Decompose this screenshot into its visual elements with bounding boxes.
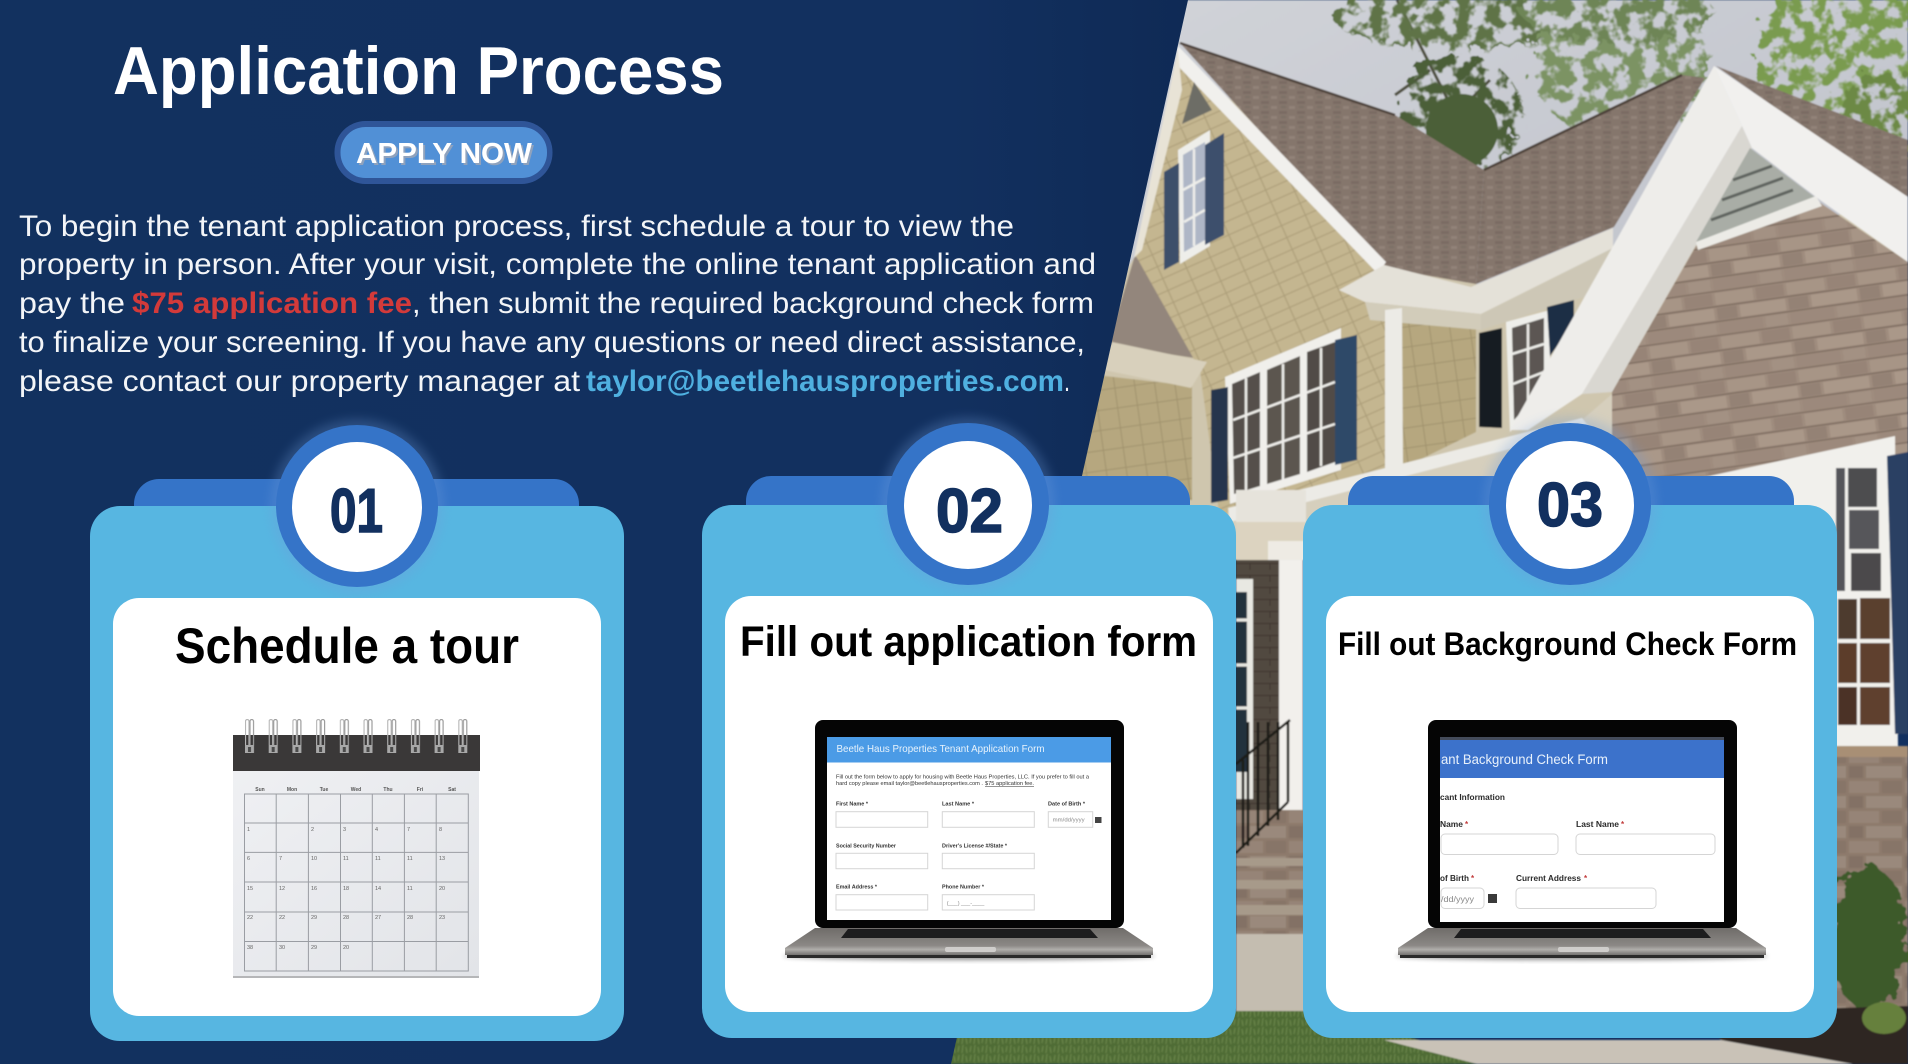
laptop with tenant application form: Date of Birth * [1048,802,1086,808]
laptop with tenant application form: Beetle Haus Properties Tenant Application Form [836,743,1045,755]
icon: wall calendar: 14 [375,886,381,892]
porch cornice between cards [1236,490,1306,522]
photo: suburban house background [940,0,1908,1064]
laptop with background check form: * [1621,820,1625,829]
icon: wall calendar [233,719,480,978]
left gable trim [1176,46,1386,274]
large window with shutters [1211,328,1357,504]
icon: wall calendar: 38 [247,945,253,951]
laptop with background check form [1396,720,1768,960]
apply now button: APPLY NOW [356,138,533,170]
shrub [1830,866,1906,1010]
panel: step 3 fill out background check form [1303,417,1837,1038]
lawn [940,1011,1477,1064]
number badge 02: 02 [936,477,1003,546]
laptop with tenant application form: Fill out the form below to apply for housing with Beetle Haus Properties, LLC. If you prefer to fill out a [836,774,1089,780]
lower left eave [1104,342,1207,388]
house base walls [1060,60,1908,530]
icon: wall calendar: 8 [439,827,442,833]
centre window with shutters [1479,300,1574,432]
card body [1303,505,1837,1038]
icon: wall calendar: 1 [247,827,250,833]
intro paragraph: pay the [19,287,125,320]
stone foundation, right [1830,757,1908,1027]
intro paragraph [19,210,1096,398]
icon: wall calendar: Thu [383,787,393,793]
sky [940,0,1908,520]
laptop with tenant application form: Email Address * [836,885,878,891]
main roof, left plane [1180,43,1484,284]
right lower window [1700,436,1898,746]
downspout and corner board [1385,308,1403,470]
icon: wall calendar: Mon [287,787,297,793]
lower left roof [1108,255,1208,360]
number badge 03 [1483,417,1657,591]
laptop with tenant application form: hard copy please email taylor@beetlehausproperties.com . [836,781,983,787]
porch side window [1236,579,1253,799]
siding, upper gable [1136,60,1388,520]
gable fascia, left leg [1510,66,1742,430]
card body [90,506,624,1041]
porch soffit [1236,522,1306,560]
icon: wall calendar: 11 [407,886,413,892]
icon: wall calendar: 29 [311,945,317,951]
upper window [1164,130,1224,270]
icon: wall calendar: 20 [439,886,445,892]
apply now button: APPLY NOW [358,140,535,172]
number badge 01: 01 [330,477,383,546]
intro paragraph: property in person. After your visit, complete the online tenant application and [19,248,1096,281]
panel: step 1 schedule a tour [90,419,624,1041]
porch brick wall [1236,560,1286,820]
icon: wall calendar: 13 [439,856,445,862]
icon: wall calendar: 11 [375,856,381,862]
intro paragraph: . [1064,365,1070,398]
icon: wall calendar: 29 [311,915,317,921]
intro paragraph: to finalize your screening. If you have any questions or need direct assistance, [19,326,1085,359]
trees behind the roof [1335,0,1908,180]
icon: wall calendar: 10 [311,856,317,862]
front steps [1236,810,1306,934]
icon: wall calendar: 20 [343,945,349,951]
window ledge [1830,746,1908,757]
icon: wall calendar: 12 [279,886,285,892]
laptop with tenant application form: Social Security Number [836,843,896,849]
icon: wall calendar: Fri [417,787,424,793]
intro paragraph: taylor@beetlehausproperties.com [586,365,1064,398]
back roof, right [1716,66,1908,208]
porch roof and cornice [1228,394,1612,560]
icon: wall calendar: 4 [375,827,378,833]
laptop with background check form: * [1584,874,1588,883]
intro paragraph: , then submit the required background check form [412,287,1094,320]
icon: wall calendar: 28 [343,915,349,921]
inner white panel [1326,596,1814,1012]
card tab [746,476,1190,536]
title: Application Process [113,33,724,109]
icon: wall calendar: 7 [407,827,410,833]
laptop with background check form: * [1465,820,1469,829]
icon: wall calendar: 11 [407,856,413,862]
small plant [1862,1002,1906,1034]
laptop with tenant application form: (___) ___-____ [947,901,985,907]
icon: wall calendar: 16 [311,886,317,892]
icon: wall calendar: 27 [375,915,381,921]
apply now button [334,121,552,184]
laptop with background check form: Name [1440,820,1464,829]
laptop with background check form: cant Information [1440,793,1505,802]
icon: wall calendar: 28 [407,915,413,921]
heading: Fill out Background Check Form [1338,626,1797,662]
icon: wall calendar: 6 [247,856,250,862]
navy diagonal panel [0,0,1188,1064]
stone wall [1600,202,1908,530]
siding, centre bay [1399,312,1476,470]
icon: wall calendar: 2 [311,827,314,833]
gable fascia, right leg [1714,66,1908,262]
icon: wall calendar: Tue [320,787,328,793]
icon: wall calendar: 7 [279,856,282,862]
number badge 02 [881,417,1055,591]
laptop with tenant application form: mm/dd/yyyy [1053,818,1085,824]
icon: wall calendar: 15 [247,886,253,892]
icon: wall calendar: Sun [255,787,265,793]
attic vent, right [1696,148,1816,242]
gutter and cornice [1339,228,1613,314]
number badge 01 [270,419,444,593]
right shutter [1887,452,1908,734]
laptop with tenant application form: Last Name * [942,802,975,808]
intro paragraph: $75 application fee [132,287,412,320]
laptop with tenant application form [783,720,1155,960]
icon: wall calendar: Wed [351,787,361,793]
card body [702,505,1236,1038]
porch column [1279,560,1303,812]
heading: Schedule a tour [175,618,519,674]
laptop with background check form: Last Name [1576,820,1620,829]
laptop with background check form: ant Background Check Form [1441,752,1608,767]
laptop with tenant application form: First Name * [836,802,869,808]
intro paragraph: To begin the tenant application process, first schedule a tour to view the [19,210,1014,243]
heading: Fill out application form [740,618,1197,666]
laptop with tenant application form: Driver's License #/State * [942,843,1008,849]
icon: wall calendar: 23 [439,915,445,921]
number badge 03: 03 [1537,471,1603,540]
inner white panel [725,596,1213,1012]
gable soffit [1582,126,1752,394]
icon: wall calendar: 11 [343,856,349,862]
laptop with tenant application form: $75 application fee. [985,781,1034,787]
intro paragraph: please contact our property manager at [19,365,581,398]
panel: step 2 fill out application form [702,417,1236,1038]
stair railing [1236,720,1290,853]
siding, lower left bay [1060,372,1192,500]
icon: wall calendar: 22 [247,915,253,921]
laptop with background check form: Current Address [1516,874,1582,883]
mulch bed [1700,1006,1908,1064]
card tab [1348,476,1794,536]
inner white panel [113,598,601,1016]
sidewalk [1384,1040,1853,1064]
laptop with background check form: of Birth [1440,874,1469,883]
laptop with tenant application form: Phone Number * [942,885,985,891]
icon: wall calendar: 3 [343,827,346,833]
laptop with background check form: /dd/yyyy [1441,895,1474,904]
attic vent, left [1182,82,1212,124]
icon: wall calendar: 22 [279,915,285,921]
icon: wall calendar: 30 [279,945,285,951]
walkway [1236,934,1306,1012]
card tab [134,479,579,539]
icon: wall calendar: 18 [343,886,349,892]
icon: wall calendar: Sat [448,787,456,793]
main roof, right plane [1476,75,1705,284]
laptop with background check form: * [1471,874,1475,883]
